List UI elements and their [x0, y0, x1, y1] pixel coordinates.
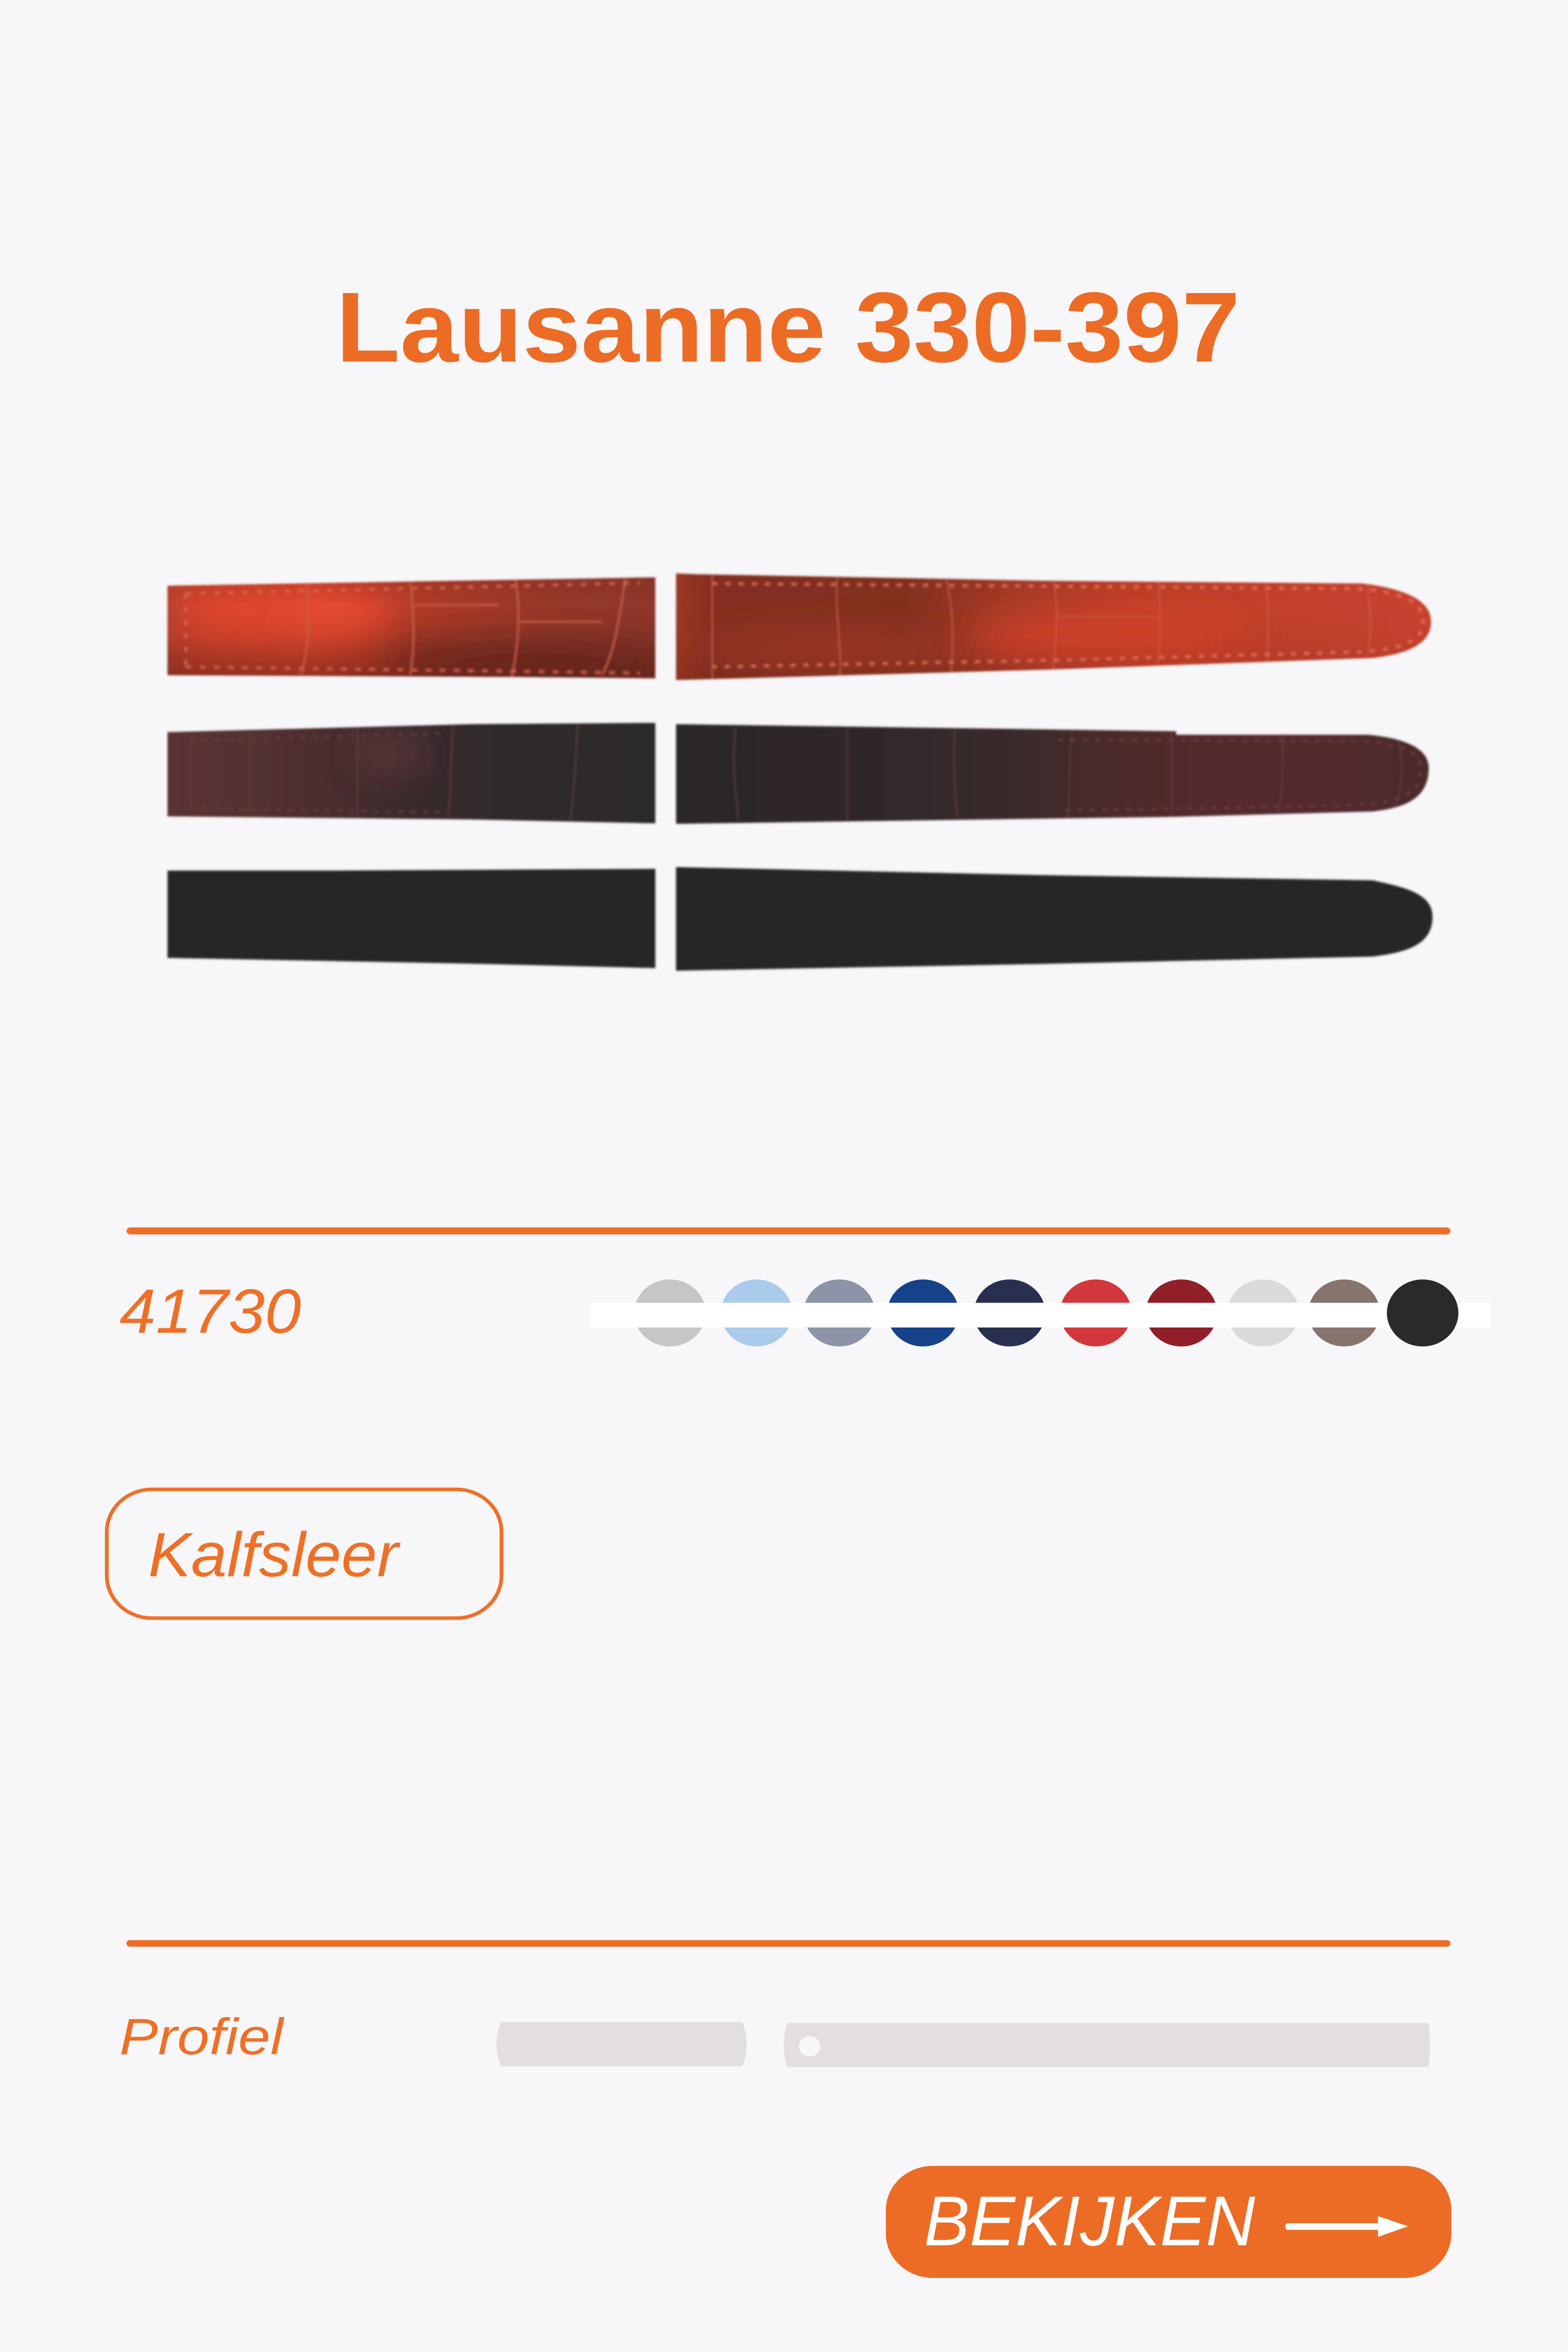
- profile label: Profiel: [119, 2008, 285, 2065]
- colour swatches: [591, 1279, 1491, 1346]
- watch straps image: [160, 569, 1433, 971]
- article number: 41730: [119, 1276, 301, 1346]
- icon: arrow: [1285, 2216, 1408, 2237]
- strap: red long piece: [676, 569, 1433, 683]
- profile silhouette: short piece: [496, 2022, 747, 2066]
- strap: red short piece: [166, 576, 657, 680]
- strap: brown long piece: [676, 721, 1433, 827]
- button: [886, 2166, 1451, 2278]
- material tag: Kalfsleer: [148, 1520, 401, 1590]
- divider line bottom: [127, 1940, 1450, 1947]
- strap: black short piece: [167, 869, 655, 968]
- material tag: [107, 1489, 501, 1618]
- title: Lausanne 330-397: [336, 272, 1240, 383]
- divider line top: [127, 1227, 1450, 1234]
- button: BEKIJKEN: [924, 2182, 1256, 2260]
- profile silhouette: long piece: [784, 2023, 1430, 2067]
- strap: black long piece: [676, 867, 1433, 971]
- strap: brown short piece: [160, 719, 663, 829]
